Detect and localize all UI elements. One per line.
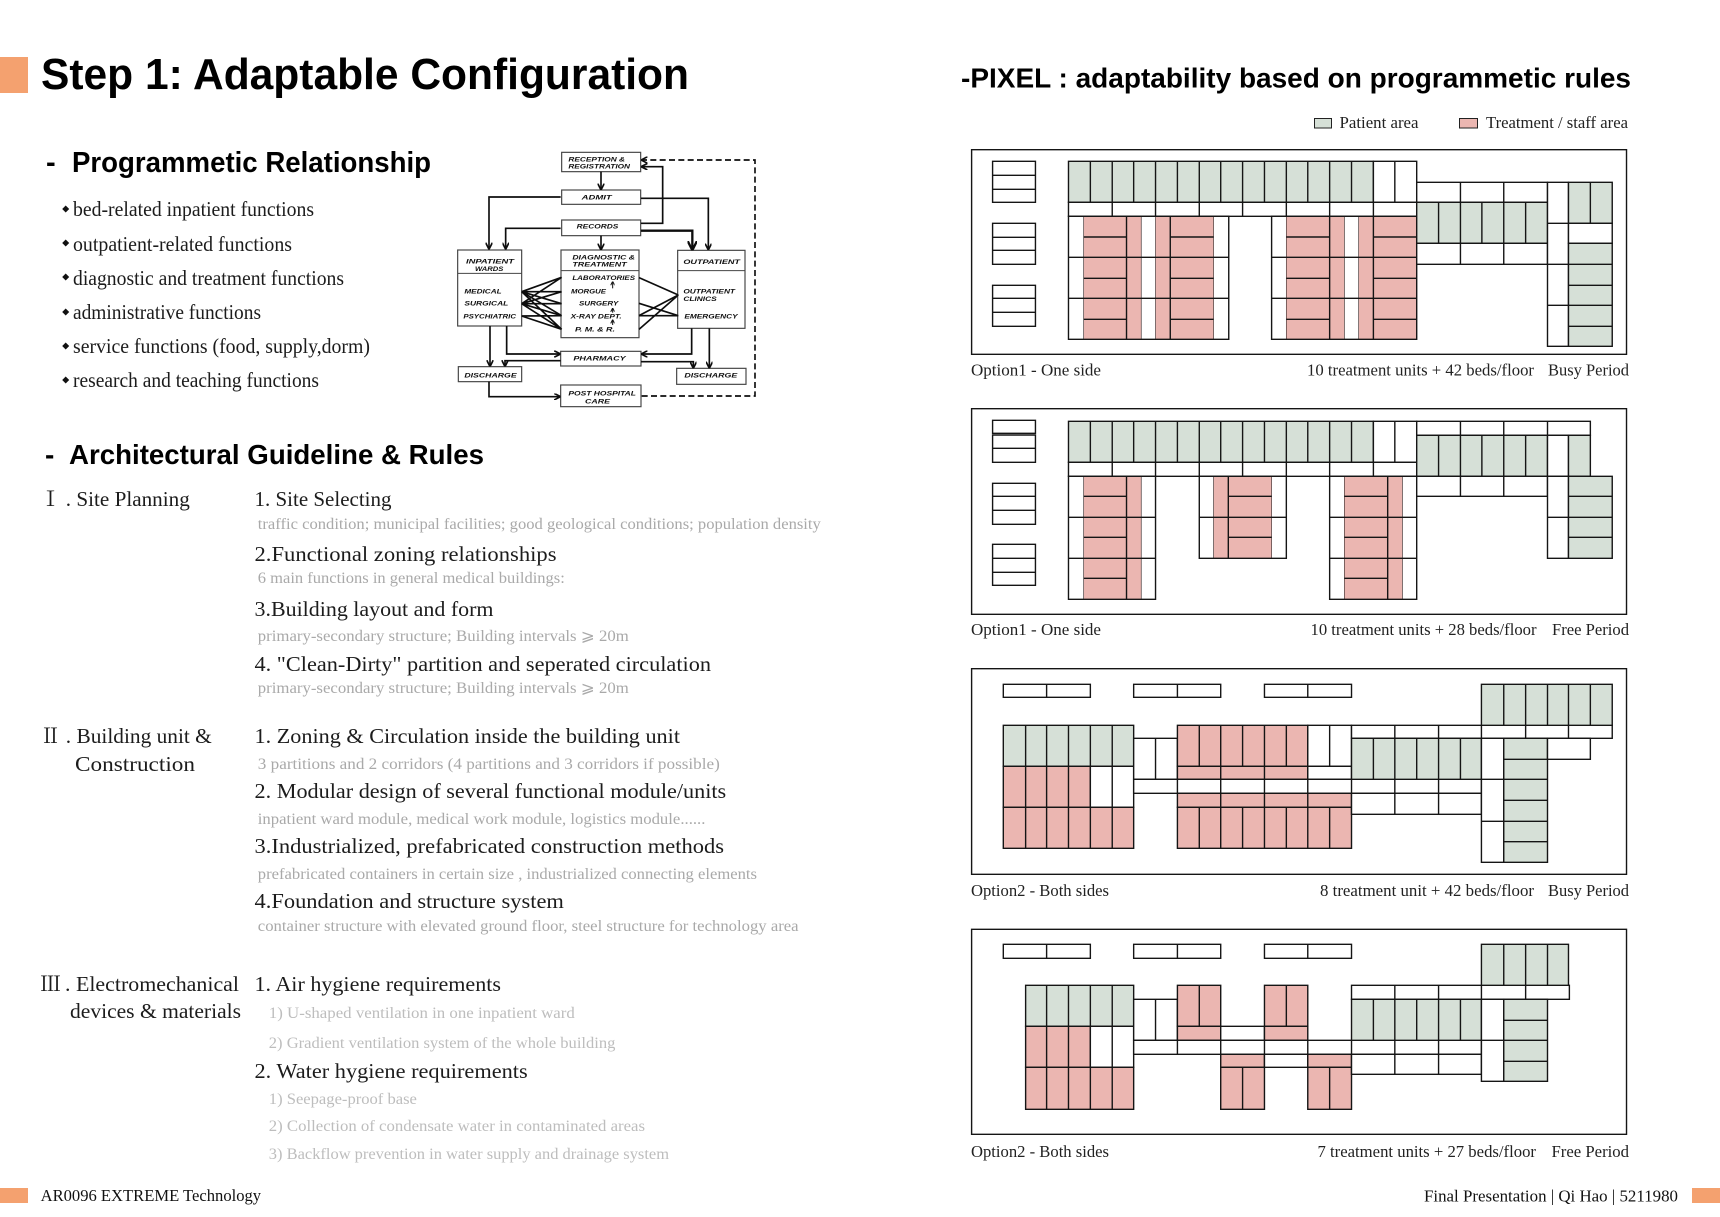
heading: programmetic relationship: - <box>46 147 56 179</box>
list: hospital functions: research and teaching functions <box>73 368 319 392</box>
flow diagram: hospital programme relationships: ADMIT <box>580 194 613 201</box>
footer right: presentation credit: Final Presentation | Qi Hao | 5211980 <box>1424 1186 1678 1206</box>
flow diagram: hospital programme relationships: REGISTRATION <box>568 163 630 170</box>
plan panel: option 1 busy period <box>972 150 1627 354</box>
section II: building unit and construction: inpatient ward module, medical work module, logistics module...... <box>258 811 705 828</box>
caption: option 2 free period <box>971 1142 1630 1161</box>
section III: electromechanical devices and materials: Ⅲ <box>40 972 61 996</box>
flow diagram: hospital programme relationships: MEDICAL <box>464 288 502 295</box>
caption: option 1 free period: Option1 - One side <box>971 620 1101 639</box>
flow diagram: hospital programme relationships: POST HOSPITAL <box>568 391 636 398</box>
flow diagram: hospital programme relationships: RECORDS <box>577 224 619 231</box>
flow diagram: hospital programme relationships: LABORATORIES <box>572 275 636 282</box>
section III: electromechanical devices and materials <box>40 972 670 1163</box>
section II: building unit and construction: 1. Zoning & Circulation inside the building unit <box>254 724 680 748</box>
section III: electromechanical devices and materials: 1) Seepage-proof base <box>269 1091 417 1108</box>
caption: option 1 free period: Free Period <box>1552 620 1630 639</box>
flow diagram: hospital programme relationships: RECEPTION & <box>568 157 625 164</box>
section II: building unit and construction: container structure with elevated ground floor, steel structure for technology area <box>258 918 799 935</box>
caption: option 1 free period: 10 treatment units + 28 beds/floor <box>1310 620 1537 639</box>
heading: programmetic relationship: Programmetic Relationship <box>72 147 431 179</box>
caption: option 2 free period: 7 treatment units + 27 beds/floor <box>1318 1142 1537 1161</box>
section II: building unit and construction: 3 partitions and 2 corridors (4 partitions and 3 corridors if possible) <box>258 756 720 773</box>
footer right: orange marker <box>1692 1188 1720 1203</box>
flow diagram: hospital programme relationships: DISCHARGE <box>684 373 738 380</box>
flow diagram: hospital programme relationships: CARE <box>585 398 611 405</box>
caption: option 1 busy period: Busy Period <box>1548 360 1630 380</box>
flow diagram: hospital programme relationships: P. M. & R. <box>575 327 615 334</box>
section I: site planning: 2.Functional zoning relationships <box>254 542 556 566</box>
section I: site planning: 6 main functions in general medical buildings: <box>258 570 565 587</box>
list: hospital functions: bed-related inpatient functions <box>73 197 314 221</box>
plan panel: option 1 free period <box>972 409 1627 614</box>
legend: Patient area <box>1340 113 1419 132</box>
caption: option 2 busy period: Option2 - Both sides <box>971 881 1109 900</box>
flow diagram: hospital programme relationships: DIAGNOSTIC & <box>572 254 635 261</box>
flow diagram: hospital programme relationships: SURGERY <box>579 301 619 308</box>
section I: site planning: primary-secondary structure; Building intervals ⩾ 20m <box>258 680 629 697</box>
caption: option 2 free period: Free Period <box>1552 1142 1630 1161</box>
heading: pixel adaptability: -PIXEL : adaptability based on programmetic rules <box>961 62 1631 94</box>
flow diagram: hospital programme relationships: PSYCHIATRIC <box>463 313 516 320</box>
flow diagram: hospital programme relationships: DISCHARGE <box>464 373 517 380</box>
plan panel: option 2 free period <box>972 929 1627 1134</box>
flow diagram: hospital programme relationships: INPATIENT <box>466 258 515 265</box>
section I: site planning: 1. Site Selecting <box>254 487 392 511</box>
section II: building unit and construction: Construction <box>75 752 196 776</box>
section III: electromechanical devices and materials: 2. Water hygiene requirements <box>254 1059 528 1083</box>
section III: electromechanical devices and materials: 1. Air hygiene requirements <box>254 972 501 996</box>
title: Step 1: Adaptable Configuration <box>41 50 689 99</box>
section II: building unit and construction: 4.Foundation and structure system <box>254 889 564 913</box>
footer left: course name: AR0096 EXTREME Technology <box>41 1186 262 1205</box>
flow diagram: hospital programme relationships: OUTPATIENT <box>683 259 741 266</box>
flow diagram: hospital programme relationships: MORGUE <box>571 288 607 295</box>
caption: option 1 busy period: 10 treatment units + 42 beds/floor <box>1307 360 1535 380</box>
section I: site planning: . Site Planning <box>66 487 190 511</box>
flow diagram: hospital programme relationships: SURGICAL <box>464 301 508 308</box>
flow diagram: hospital programme relationships: PHARMACY <box>573 356 626 363</box>
section II: building unit and construction: prefabricated containers in certain size , industrialized connecting elements <box>258 866 757 883</box>
section II: building unit and construction: 2. Modular design of several functional module/units <box>254 779 726 803</box>
flow diagram: hospital programme relationships: X-RAY DEPT. <box>569 313 622 320</box>
caption: option 2 busy period: Busy Period <box>1548 881 1630 900</box>
caption: option 2 busy period: 8 treatment unit + 42 beds/floor <box>1320 881 1535 900</box>
section II: building unit and construction: 3.Industrialized, prefabricated construction methods <box>254 834 724 858</box>
section II: building unit and construction <box>40 724 799 935</box>
list: hospital functions: diagnostic and treatment functions <box>73 266 344 290</box>
section I: site planning <box>40 487 821 697</box>
caption: option 2 busy period <box>971 881 1630 900</box>
flow diagram: hospital programme relationships: OUTPATIENT <box>683 288 736 295</box>
flow diagram: hospital programme relationships: WARDS <box>475 266 504 273</box>
caption: option 1 busy period <box>971 360 1630 380</box>
plan panel: option 2 busy period <box>972 669 1627 874</box>
caption: option 1 free period <box>971 620 1630 639</box>
flow diagram: hospital programme relationships: TREATMENT <box>572 261 628 268</box>
caption: option 2 free period: Option2 - Both sides <box>971 1142 1109 1161</box>
section III: electromechanical devices and materials: devices & materials <box>70 999 241 1023</box>
section III: electromechanical devices and materials: 2) Gradient ventilation system of the whole building <box>269 1035 615 1052</box>
section I: site planning: 4. "Clean-Dirty" partition and seperated circulation <box>254 652 712 676</box>
list: hospital functions: administrative functions <box>73 300 261 324</box>
legend: Treatment / staff area <box>1486 113 1629 132</box>
section II: building unit and construction: Ⅱ <box>40 724 61 748</box>
section I: site planning: traffic condition; municipal facilities; good geological conditions; population density <box>258 516 821 533</box>
flow diagram: hospital programme relationships: EMERGENCY <box>684 313 738 320</box>
list: hospital functions: outpatient-related functions <box>73 232 292 256</box>
list: hospital functions <box>62 197 370 392</box>
section III: electromechanical devices and materials: 1) U-shaped ventilation in one inpatient ward <box>269 1005 575 1022</box>
title marker: orange square <box>0 57 28 93</box>
section III: electromechanical devices and materials: 3) Backflow prevention in water supply and drainage system <box>269 1146 670 1163</box>
section I: site planning: Ⅰ <box>40 487 61 511</box>
flow diagram: hospital programme relationships <box>458 152 755 407</box>
flow diagram: hospital programme relationships: CLINICS <box>683 296 717 303</box>
section I: site planning: 3.Building layout and form <box>254 597 494 621</box>
heading: architectural guideline and rules: Architectural Guideline & Rules <box>69 439 484 470</box>
heading: architectural guideline and rules: - <box>45 439 54 470</box>
section III: electromechanical devices and materials: 2) Collection of condensate water in contaminated areas <box>269 1118 645 1135</box>
section III: electromechanical devices and materials: . Electromechanical <box>65 972 239 996</box>
legend <box>1314 113 1629 132</box>
footer left: orange marker <box>0 1188 28 1203</box>
caption: option 1 busy period: Option1 - One side <box>971 360 1101 380</box>
list: hospital functions: service functions (food, supply,dorm) <box>73 334 370 358</box>
section II: building unit and construction: . Building unit & <box>66 724 212 748</box>
section I: site planning: primary-secondary structure; Building intervals ⩾ 20m <box>258 628 629 645</box>
